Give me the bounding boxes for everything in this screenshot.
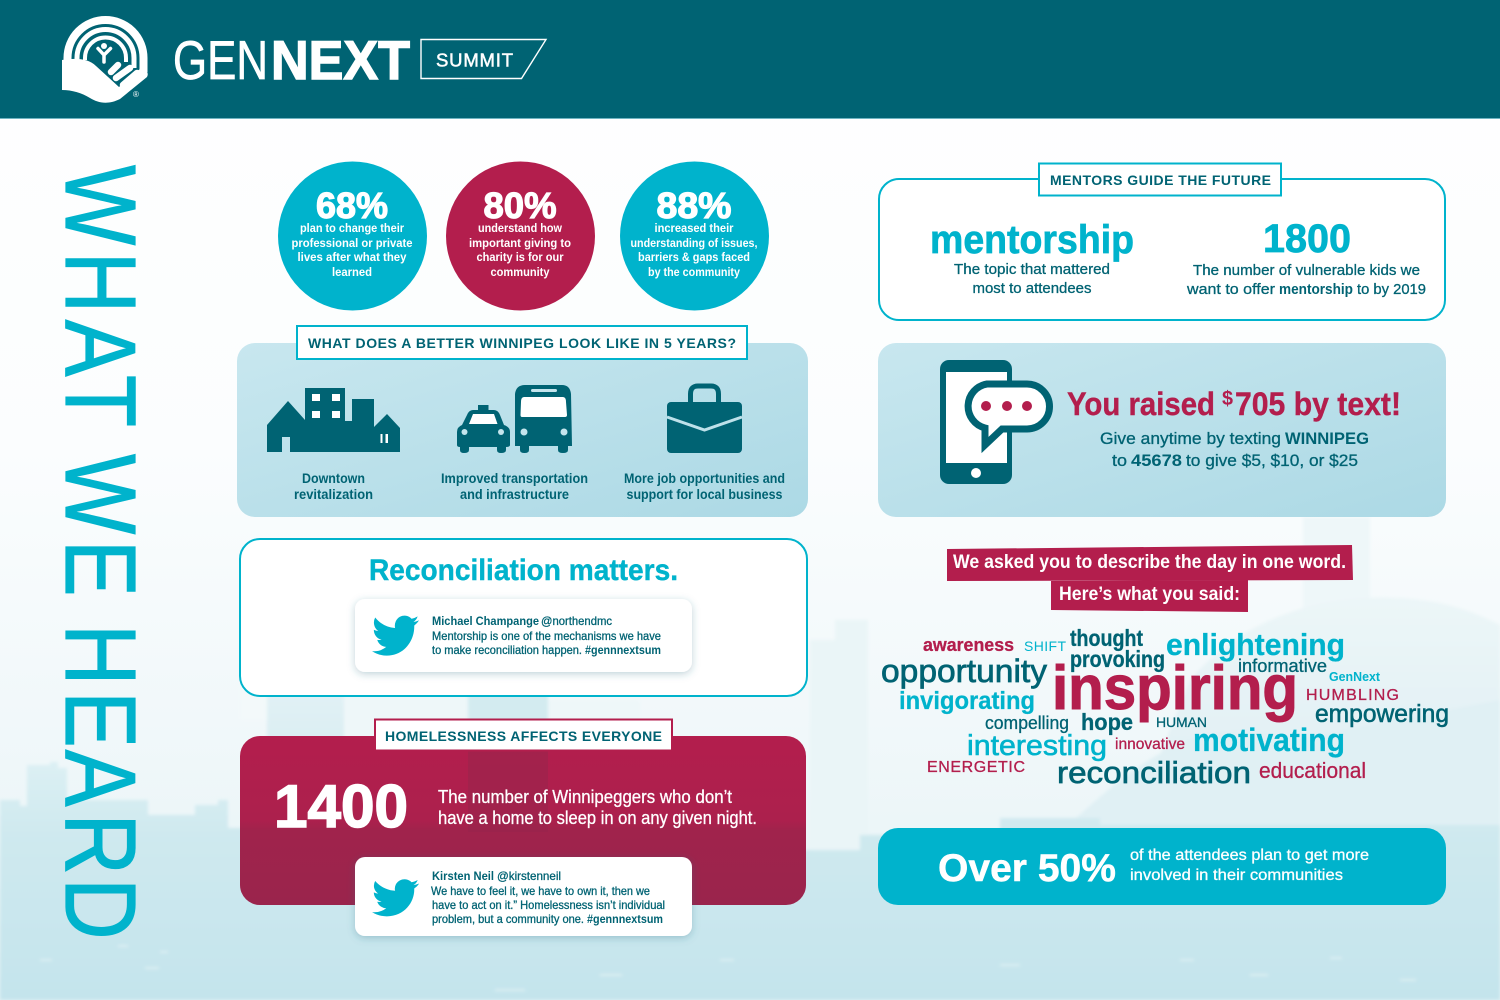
stat circle: 88%: increased their <box>654 223 734 235</box>
stat: mentorship: most to attendees <box>972 280 1092 297</box>
word cloud: provoking <box>1070 646 1165 672</box>
heading: you raised $705 by text <box>1067 386 1401 422</box>
word cloud <box>881 625 1449 790</box>
word cloud: thought <box>1070 625 1143 651</box>
stat circle: 68%: plan to change their <box>300 223 404 235</box>
word cloud: SHIFT <box>1024 638 1066 654</box>
panel: over 50% <box>878 828 1446 905</box>
tweet card: Michael Champange: #gennnextsum <box>585 643 661 657</box>
badge: SUMMIT: SUMMIT <box>436 50 513 70</box>
stat circle: 68%: 68% <box>316 185 388 226</box>
stat circle: 80%: community <box>490 267 550 279</box>
stat circle: 88%: 88% <box>656 185 732 226</box>
banner: describe the day <box>947 545 1353 581</box>
label: more job opportunities: support for local business <box>626 486 783 502</box>
stat circle: 80%: important giving to <box>469 238 571 250</box>
stat: 1800 <box>1186 217 1426 298</box>
text: attendees plan: of the attendees plan to get more <box>1130 847 1369 864</box>
tweet card: Michael Champange: Michael Champange <box>432 614 539 628</box>
text: give by texting: Give anytime by texting <box>1100 429 1281 448</box>
banner: here's what you said: Here’s what you said: <box>1059 584 1240 605</box>
heading: homelessness <box>375 720 672 750</box>
icon: twitter bird <box>372 879 419 916</box>
word cloud: reconciliation <box>1057 755 1251 790</box>
tweet card: Kirsten Neil: We have to feel it, we have to own it, then we <box>431 884 650 898</box>
word cloud: HUMAN <box>1156 714 1207 730</box>
stat circle: 88%: understanding of issues, <box>630 238 758 250</box>
panel: mentors guide the future <box>879 164 1445 320</box>
icon: city buildings <box>267 388 400 452</box>
text: homelessness description <box>438 787 757 828</box>
word cloud: enlightening <box>1166 627 1345 662</box>
label: improved transportation: and infrastructure <box>460 486 569 502</box>
word cloud: empowering <box>1315 700 1449 728</box>
tweet card: Michael Champange <box>355 599 692 672</box>
tweet card: Kirsten Neil: #gennnextsum <box>587 912 663 926</box>
icon: phone with speech bubble <box>940 360 1050 484</box>
word cloud: HUMBLING <box>1306 687 1399 704</box>
word cloud: educational <box>1259 758 1366 783</box>
text: give by texting: 45678 <box>1131 451 1182 470</box>
panel: reconciliation matters <box>240 539 807 696</box>
stat circle: 80% <box>446 162 595 310</box>
word cloud: innovative <box>1115 736 1185 753</box>
stat: 1800: 1800 <box>1263 217 1351 261</box>
heading: better Winnipeg: WHAT DOES A BETTER WINNIPEG LOOK LIKE IN 5 YEARS? <box>308 335 736 351</box>
heading: mentors guide the future: MENTORS GUIDE THE FUTURE <box>1050 172 1271 188</box>
stat: 1800: mentorship <box>1279 281 1353 298</box>
heading: better Winnipeg <box>297 326 747 359</box>
icon: briefcase <box>667 386 742 453</box>
stat: 1800: The number of vulnerable kids we <box>1193 262 1420 279</box>
heading: reconciliation matters: Reconciliation matters. <box>369 554 678 587</box>
word cloud: GenNext <box>1329 669 1381 684</box>
tweet card: Michael Champange: to make reconciliation happen. <box>432 643 582 657</box>
tweet card: Kirsten Neil: @kirstenneil <box>497 869 561 883</box>
icon: taxi and bus <box>457 385 572 453</box>
stat circle: 80%: charity is for our <box>476 252 564 264</box>
stat circle: 68%: professional or private <box>292 238 412 250</box>
heading: you raised $705 by text: $ <box>1222 388 1233 410</box>
label: downtown revitalization <box>294 470 373 502</box>
stat circle: 88%: barriers & gaps faced <box>638 252 750 264</box>
heading: homelessness: HOMELESSNESS AFFECTS EVERYONE <box>385 728 662 744</box>
tweet card: Kirsten Neil: Kirsten Neil <box>432 869 494 883</box>
stat circle: 80%: understand how <box>478 223 562 235</box>
stat circle: 88%: by the community <box>648 267 741 279</box>
label: downtown revitalization: Downtown <box>302 470 365 486</box>
stat circle: 80%: 80% <box>484 185 556 226</box>
logo: United Way hand and rainbow: ® <box>133 90 139 99</box>
text: give by texting: to give $5, $10, or $25 <box>1186 451 1358 470</box>
label: improved transportation <box>441 470 588 502</box>
text: give by texting <box>1100 429 1369 470</box>
stat: mentorship: The topic that mattered <box>954 261 1110 278</box>
vertical title: WHAT WE HEARD: WHAT WE HEARD <box>44 165 157 940</box>
tweet card: Kirsten Neil: problem, but a community one. <box>432 912 584 926</box>
word cloud: opportunity <box>881 653 1047 689</box>
heading: you raised $705 by text: 705 by text! <box>1235 386 1401 422</box>
tweet card: Kirsten Neil: have to act on it.” Homelessness isn’t individual <box>432 898 665 912</box>
word cloud: awareness <box>923 635 1014 655</box>
word cloud: informative <box>1238 656 1327 676</box>
stat circle: 68% <box>278 162 427 310</box>
text: homelessness description: The number of Winnipeggers who don’t <box>438 787 732 807</box>
stat: mentorship <box>930 218 1134 297</box>
text: give by texting: WINNIPEG <box>1285 429 1369 448</box>
heading: mentors guide the future <box>1039 164 1281 196</box>
text: homelessness description: have a home to sleep in on any given night. <box>438 808 757 828</box>
word cloud: motivating <box>1193 722 1345 758</box>
word cloud: interesting <box>967 730 1107 762</box>
tweet card: Michael Champange: Mentorship is one of the mechanisms we have <box>432 629 661 643</box>
label: improved transportation: Improved transportation <box>441 470 588 486</box>
wordmark: GENNEXT: NEXT <box>271 29 410 91</box>
stat: mentorship: mentorship <box>930 218 1134 262</box>
word cloud: ENERGETIC <box>927 759 1025 776</box>
word cloud: inspiring <box>1052 654 1298 723</box>
stat circle: 88% <box>620 162 769 310</box>
badge: SUMMIT <box>421 40 546 78</box>
label: more job opportunities <box>624 470 785 502</box>
stat: 1400: 1400 <box>274 773 408 840</box>
text: give by texting: to <box>1112 451 1127 470</box>
tweet card: Michael Champange: @northendmc <box>541 614 612 628</box>
stat: 1800: want to offer <box>1186 281 1275 298</box>
stat: over 50%: Over 50% <box>938 847 1116 890</box>
text: attendees plan: involved in their communities <box>1130 867 1343 884</box>
tweet card: Kirsten Neil <box>355 857 692 936</box>
panel: you raised by text <box>878 343 1446 517</box>
word cloud: compelling <box>985 713 1069 733</box>
word cloud: hope <box>1081 709 1133 735</box>
stat: 1800: to by 2019 <box>1357 281 1426 298</box>
panel: better Winnipeg in 5 years <box>237 326 808 517</box>
banner: describe the day: We asked you to describe the day in one word. <box>953 552 1346 573</box>
banner: here's what you said <box>1051 580 1248 612</box>
heading: you raised $705 by text: You raised <box>1067 386 1215 422</box>
logo: United Way hand and rainbow <box>62 20 148 103</box>
wordmark: GENNEXT: GEN <box>173 29 268 91</box>
icon: twitter bird <box>372 616 419 656</box>
word cloud: invigorating <box>899 687 1035 715</box>
label: more job opportunities: More job opportunities and <box>624 470 785 486</box>
stat circle: 68%: lives after what they <box>298 252 407 264</box>
header band <box>0 0 1500 119</box>
text: attendees plan <box>1130 847 1369 884</box>
label: downtown revitalization: revitalization <box>294 486 373 502</box>
stat circle: 68%: learned <box>332 267 372 279</box>
wordmark: GENNEXT <box>173 29 410 91</box>
panel: homelessness affects everyone <box>240 720 806 936</box>
